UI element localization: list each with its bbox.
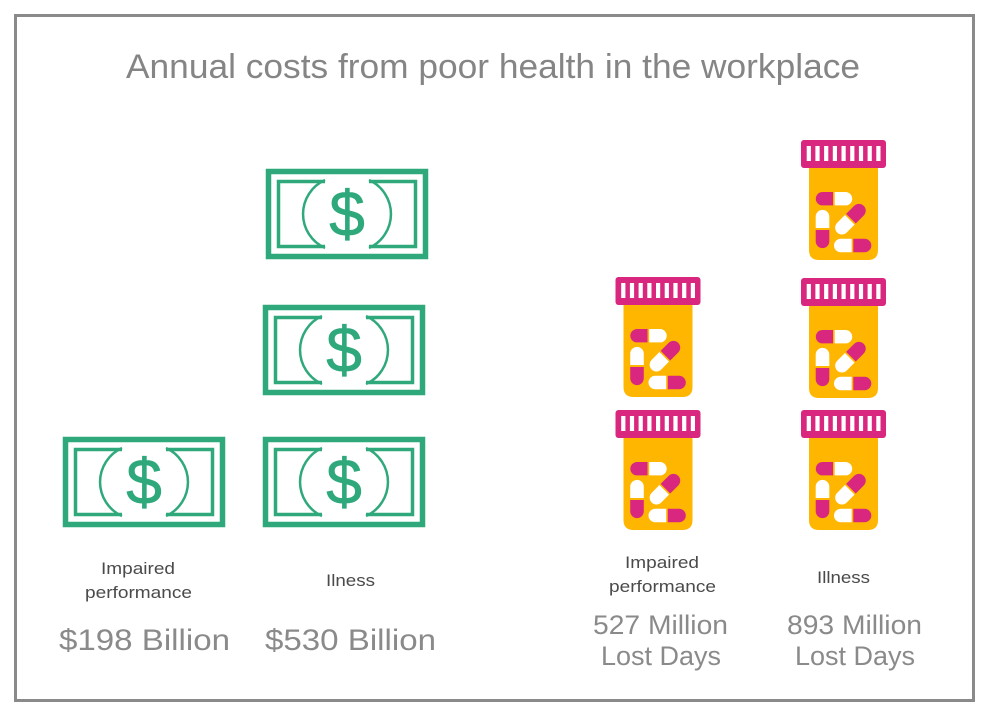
icon: pill bottle bottom [801, 410, 886, 530]
label: impaired performance: Impaired [101, 559, 175, 578]
icon: money bill middle: $ [326, 314, 362, 386]
icon: money bill top [268, 172, 426, 256]
label: illness: Ilness [326, 571, 375, 590]
panel: impaired performance cost [59, 440, 230, 657]
value: $530 Billion: $530 Billion [265, 624, 436, 657]
icon: money bill: $ [126, 446, 162, 518]
icon: money bill bottom: $ [326, 446, 362, 518]
label: illness: Illness [817, 568, 870, 587]
value: 527 Million Lost Days: 527 Million [593, 610, 728, 640]
label: impaired performance [609, 553, 716, 596]
panel: illness lost days [787, 140, 922, 671]
icon: money bill bottom [266, 440, 422, 524]
value: $198 Billion: $198 Billion [59, 624, 230, 657]
icon: pill bottle top [616, 277, 700, 397]
value: 893 Million Lost Days [787, 610, 922, 671]
icon: money bill middle [266, 308, 422, 392]
panel: illness cost [265, 172, 436, 657]
value: 527 Million Lost Days: Lost Days [601, 641, 721, 671]
value: 893 Million Lost Days: Lost Days [795, 641, 915, 671]
label: impaired performance [85, 559, 192, 602]
label: impaired performance: performance [609, 577, 716, 596]
icon: money bill [66, 440, 222, 524]
icon: pill bottle bottom [616, 410, 700, 530]
value: 893 Million Lost Days: 893 Million [787, 610, 922, 640]
title: Annual costs from poor health in the workplace [126, 48, 860, 86]
icon: pill bottle top [801, 140, 886, 260]
icon: money bill top: $ [329, 178, 365, 250]
label: impaired performance: Impaired [625, 553, 699, 572]
label: impaired performance: performance [85, 583, 192, 602]
panel: impaired performance lost days [593, 277, 728, 671]
value: 527 Million Lost Days [593, 610, 728, 671]
icon: pill bottle middle [801, 278, 886, 398]
